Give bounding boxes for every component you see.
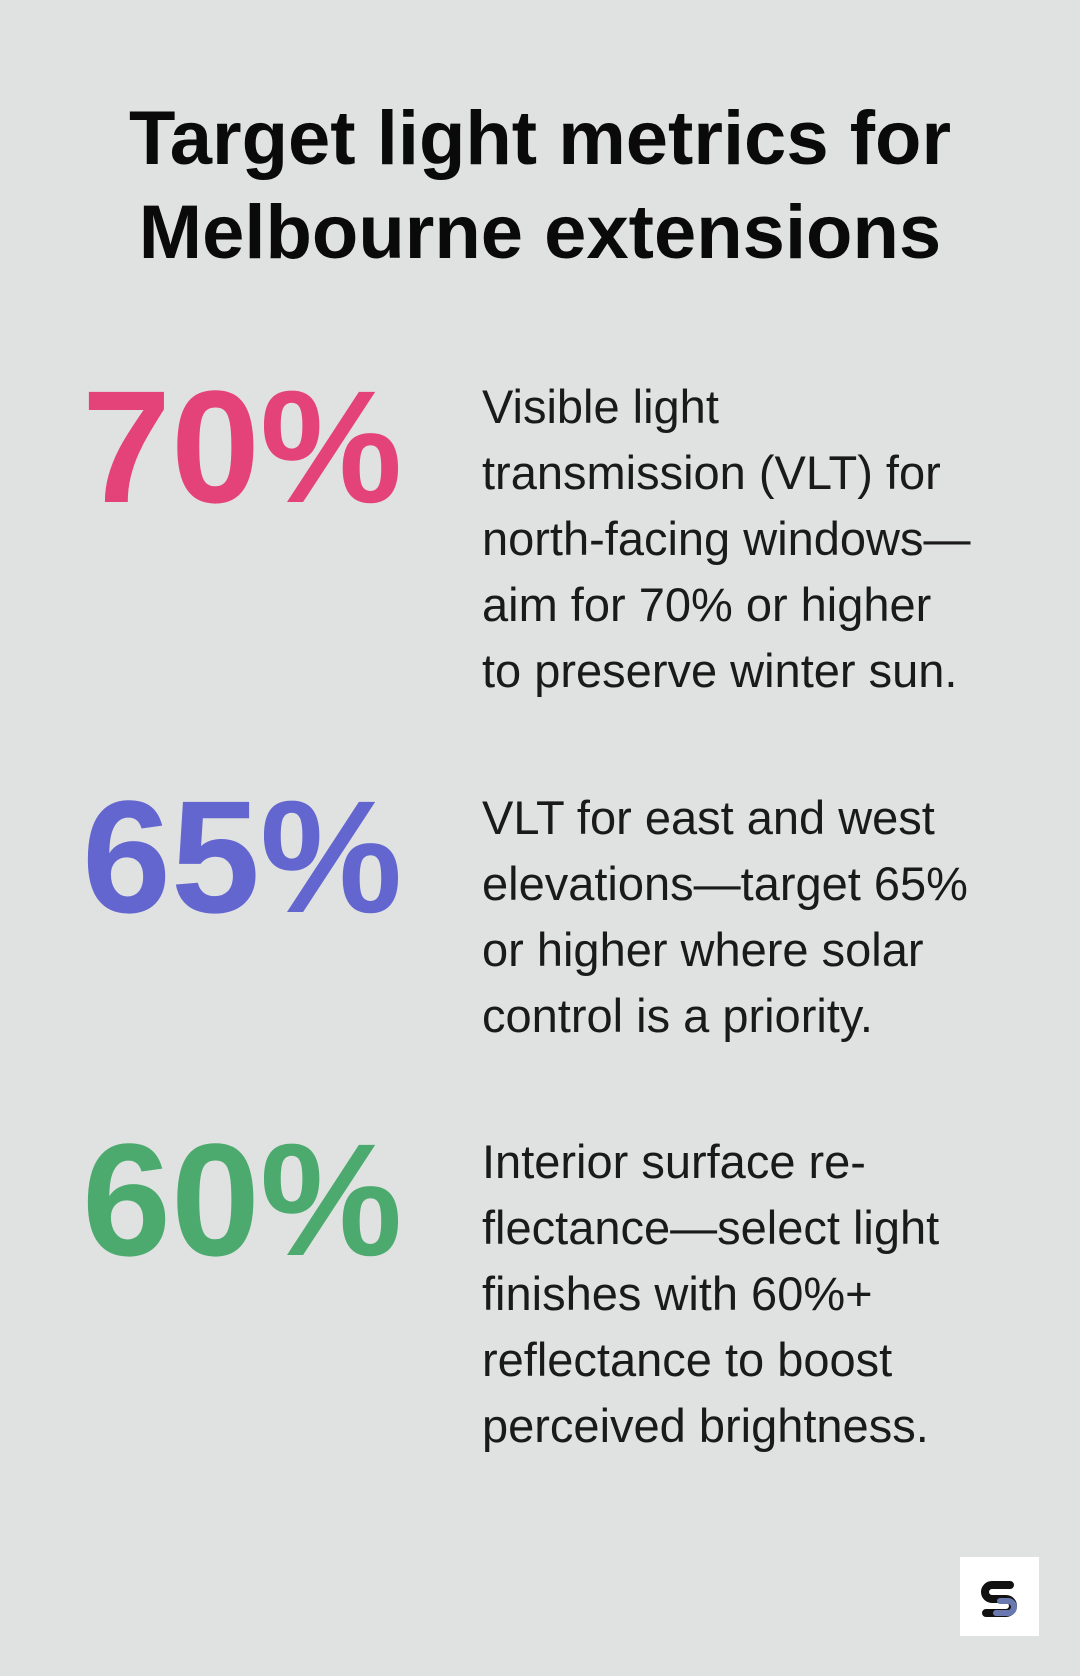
text: 70% description: to preserve winter sun. (482, 644, 957, 697)
stat: 60%: 60% (82, 1110, 402, 1289)
stat: 65%: 65% (82, 767, 402, 946)
text: 60% description: Interior surface re- (482, 1135, 866, 1188)
text: 65% description: control is a priority. (482, 989, 873, 1042)
text: 70% description (482, 380, 970, 697)
text: 60% description: reflectance to boost (482, 1333, 892, 1386)
text: 70% description: north-facing windows— (482, 512, 970, 565)
text: 60% description: flectance—select light (482, 1201, 939, 1254)
text: 65% description (482, 791, 968, 1042)
title (129, 96, 951, 275)
text: 65% description: or higher where solar (482, 923, 924, 976)
text: 70% description: aim for 70% or higher (482, 578, 931, 631)
text: 65% description: VLT for east and west (482, 791, 935, 844)
text: 65% description: elevations—target 65% (482, 857, 968, 910)
title: Target light metrics for (129, 96, 951, 181)
text: 70% description: Visible light (482, 380, 719, 433)
text: 60% description: perceived brightness. (482, 1399, 929, 1452)
text: 60% description: finishes with 60%+ (482, 1267, 873, 1320)
text: 70% description: transmission (VLT) for (482, 446, 941, 499)
logo (960, 1557, 1039, 1636)
title: Melbourne extensions (139, 190, 941, 275)
text: 60% description (482, 1135, 939, 1452)
stat: 70%: 70% (82, 357, 402, 536)
